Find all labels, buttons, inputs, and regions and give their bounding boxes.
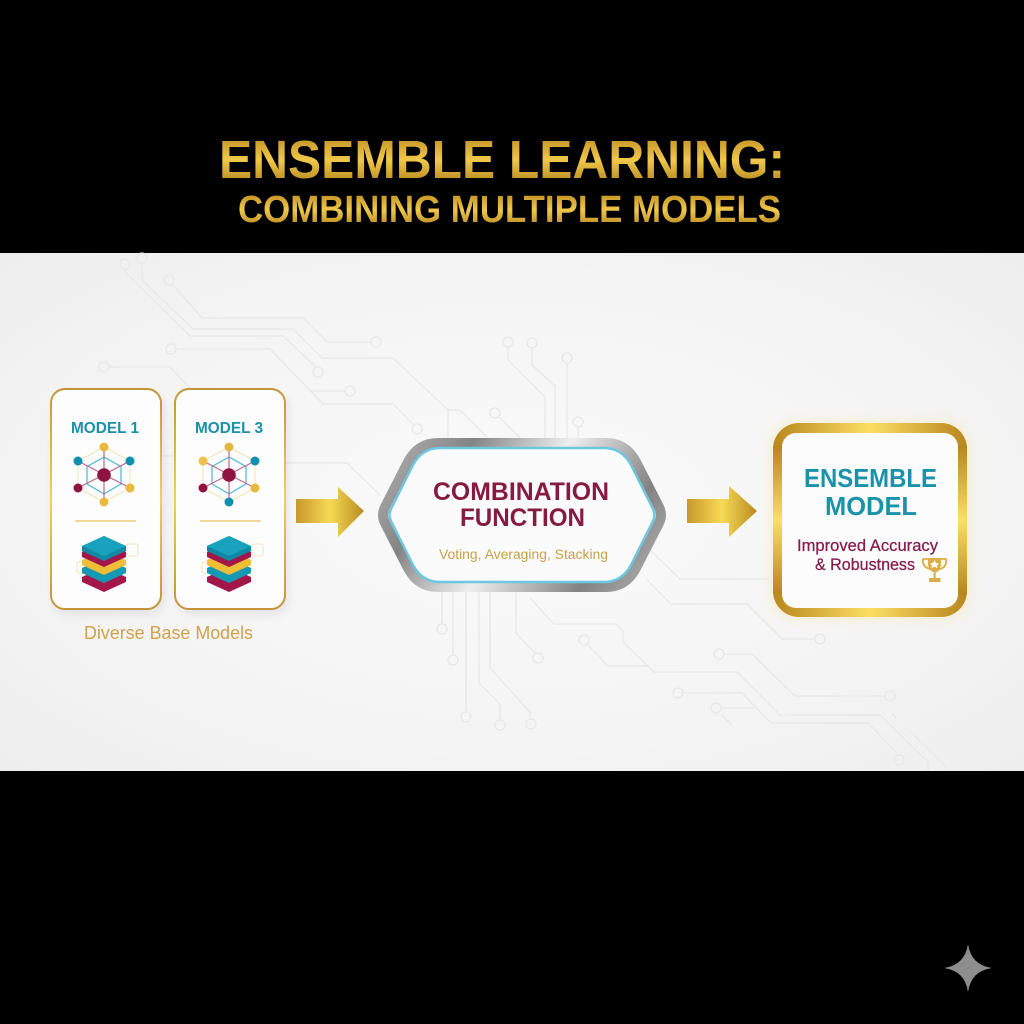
ensemble benefit text: Improved Accuracy	[797, 537, 939, 555]
icon: sparkle watermark	[944, 944, 992, 992]
icon: trophy	[923, 558, 946, 582]
panel: ensemble model	[772, 422, 968, 618]
panel: combination function	[383, 443, 661, 587]
panel: model 3 card	[175, 389, 288, 614]
arrow: models to combination	[296, 487, 364, 537]
panel: ensemble model: MODEL	[825, 493, 917, 521]
ensemble heading: ENSEMBLE	[804, 465, 937, 493]
title	[219, 130, 785, 231]
panel: ensemble model: & Robustness	[815, 556, 915, 574]
combination methods: Voting, Averaging, Stacking	[439, 546, 608, 562]
panel: combination function: FUNCTION	[460, 504, 585, 532]
caption: diverse base models: Diverse Base Models	[84, 622, 253, 643]
icon: model 3 layer stack	[202, 536, 263, 592]
model 3 label: MODEL 3	[195, 420, 263, 437]
arrow: combination to ensemble	[687, 486, 757, 537]
title line 2: COMBINING MULTIPLE MODELS	[238, 189, 781, 231]
icon: model 1 network	[74, 442, 134, 506]
panel: model 1 card	[51, 389, 164, 614]
title line 1: ENSEMBLE LEARNING:	[219, 130, 785, 190]
icon: model 1 layer stack	[77, 536, 138, 592]
panel: light diagram background	[0, 253, 1024, 771]
model 1 label: MODEL 1	[71, 420, 139, 437]
combination heading: COMBINATION	[433, 478, 609, 506]
icon: model 3 network	[198, 442, 260, 506]
